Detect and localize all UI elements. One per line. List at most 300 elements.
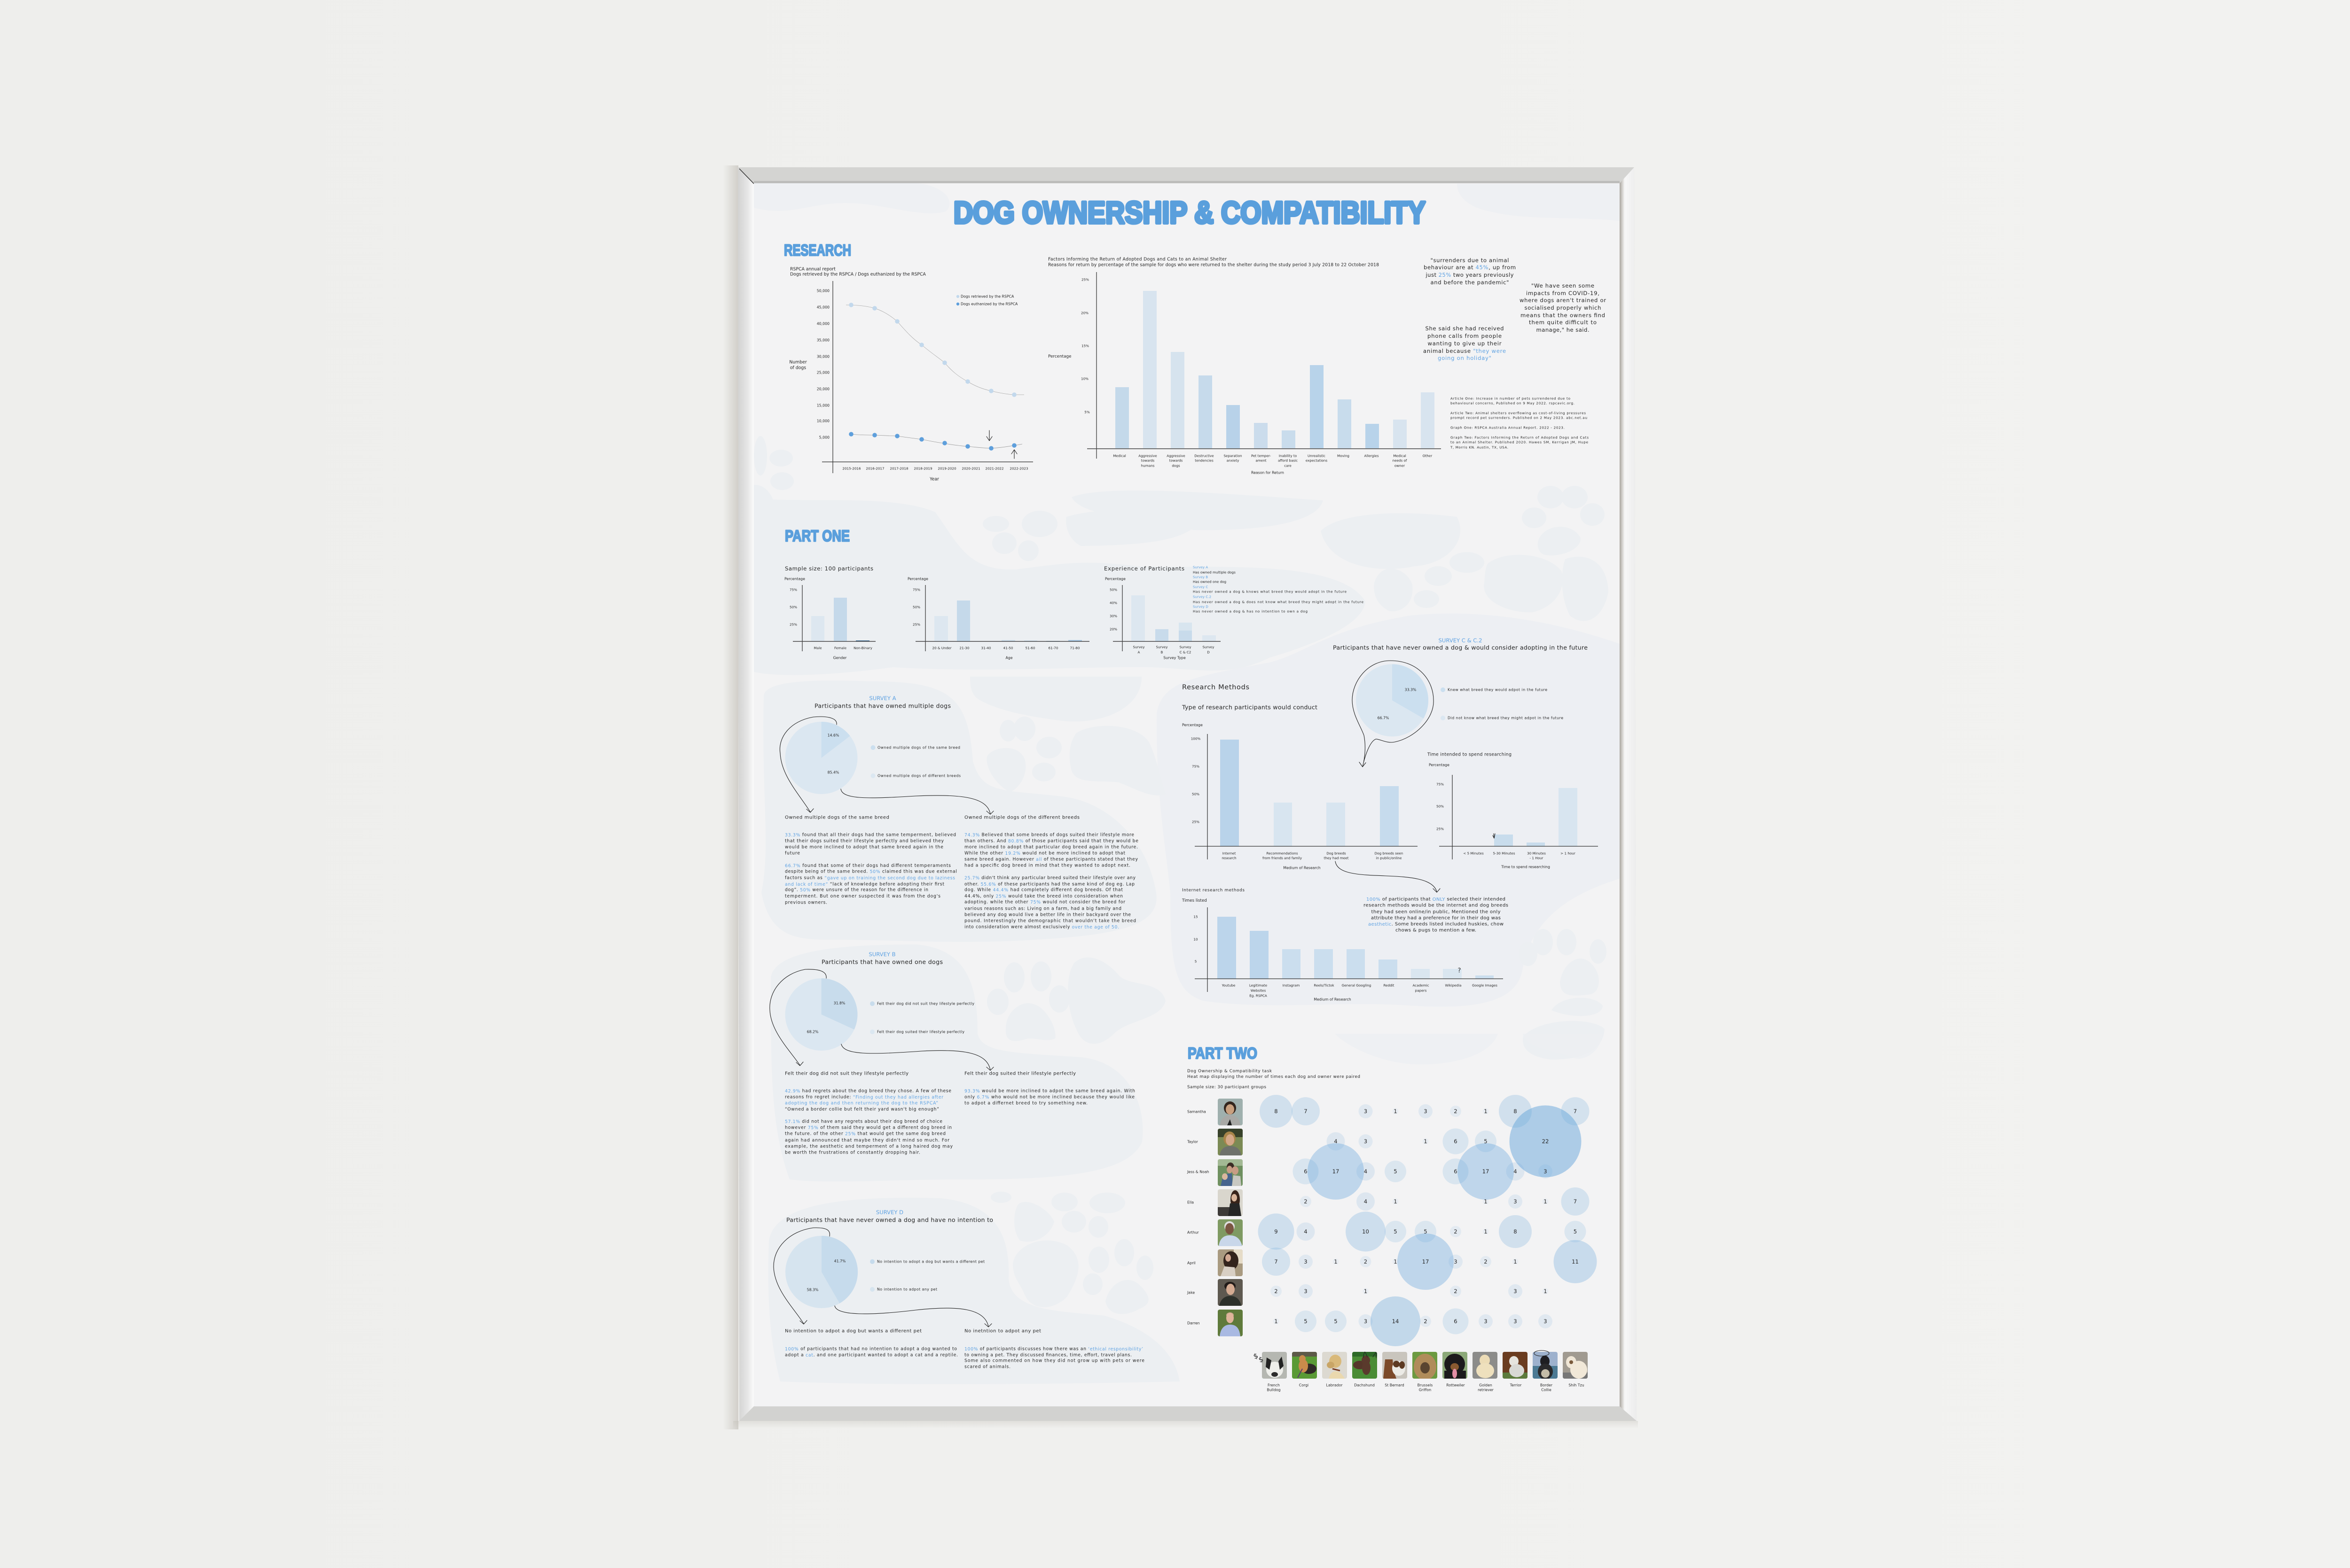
chart: gender: Male — [814, 646, 822, 650]
category labels: Inability to — [1279, 454, 1297, 458]
callout: aesthetic: they had seen online/in public, Mentioned the only — [1371, 910, 1501, 914]
dog breed labels: St Bernard — [1385, 1383, 1404, 1387]
row: April: 3 — [1304, 1258, 1308, 1265]
chart: internet research methods: Youtube — [1222, 983, 1236, 988]
owner names — [1187, 1110, 1209, 1325]
panel: research methods: Recommendations — [1267, 851, 1298, 855]
axes — [822, 281, 1033, 473]
quote: COVID impacts: where dogs aren't trained or — [1520, 297, 1606, 304]
chart: internet research methods: Internet research methods — [1182, 888, 1245, 893]
chart: experience of participants: 50% — [1110, 587, 1117, 592]
y axis labels: 10% — [1081, 377, 1089, 381]
chart: age: 75% — [913, 587, 920, 592]
panel: research methods: Research Methods — [1182, 684, 1249, 691]
x axis labels: 2020-2021 — [962, 466, 980, 471]
quote: COVID impacts: manage," he said. — [1536, 327, 1590, 333]
callout: aesthetic — [1363, 897, 1508, 933]
row: Samantha: 8 — [1274, 1108, 1278, 1115]
text: did not suit: Felt their dog did not suit they lifestyle perfectly — [785, 1071, 909, 1076]
row: Arthur — [1258, 1211, 1586, 1252]
pie chart: 33.3% — [1405, 688, 1416, 692]
doodle: halo — [1534, 1350, 1549, 1356]
panel: research methods: 25% — [1192, 819, 1199, 824]
photo: Arthur — [1218, 1219, 1243, 1246]
category labels — [1113, 454, 1432, 468]
row: Darren — [1273, 1296, 1552, 1346]
row: Jake: 3 — [1304, 1288, 1308, 1295]
text: different breeds: same breed again. However all of these participants stated that they — [964, 857, 1138, 862]
dog breed labels: French — [1268, 1383, 1280, 1387]
row: April: 1 — [1394, 1258, 1397, 1265]
text: same breed: and lack of time” “lack of knowledge before adopting their first — [785, 882, 944, 887]
text: different breeds: than others. And 80.8% of those participants said that they would be — [964, 838, 1138, 844]
chart: gender: 75% — [790, 587, 797, 592]
panel: research methods: Dog breeds seen — [1375, 851, 1403, 855]
text: any pet: scared of animals. — [964, 1365, 1010, 1369]
callout: aesthetic: aesthetic. Some breeds listed included huskies, chow — [1368, 922, 1504, 927]
text: same breed — [785, 815, 957, 905]
chart: internet research methods: ? — [1458, 967, 1461, 975]
owner names: Arthur — [1187, 1230, 1199, 1235]
category labels: afford basic — [1278, 459, 1298, 462]
row: Ella: 2 — [1304, 1198, 1308, 1205]
x axis labels: 2021-2022 — [985, 466, 1004, 471]
dog breed labels: Border — [1540, 1383, 1553, 1387]
references: prompt record pet surrenders. Published on 2 May 2023. abc.net.au — [1450, 415, 1587, 420]
references: Graph Two: Factors Informing the Return of Adopted Dogs and Cats — [1450, 435, 1589, 440]
row: Ella — [1300, 1187, 1590, 1216]
row: Arthur: 8 — [1513, 1228, 1517, 1235]
pie legend: No intention to adpot any pet — [877, 1287, 937, 1291]
pie chart — [1356, 664, 1428, 737]
text: different breeds: various reasons such as: Living on a farm, had a big family and — [964, 906, 1121, 912]
chart heading: Dogs retrieved by the RSPCA / Dogs euthanized by the RSPCA — [790, 272, 926, 277]
chart: age: Age — [1005, 656, 1013, 660]
chart: time intended to spend researching: 25% — [1436, 827, 1444, 831]
chart: age: 25% — [913, 622, 920, 627]
survey type key: Has never owned a dog & has no intention to own a dog — [1193, 609, 1308, 614]
chart: experience of participants: 30% — [1110, 614, 1117, 618]
row: Taylor: 22 — [1542, 1138, 1549, 1145]
owner photos — [1218, 1099, 1243, 1336]
pie chart: 58.3% — [807, 1287, 818, 1292]
row: Darren: 5 — [1304, 1318, 1308, 1325]
chart: experience of participants: A — [1138, 650, 1140, 654]
chart: time intended to spend researching: 5-30 Minutes — [1493, 851, 1515, 855]
text: different breeds: dog. While 44.4% had completely different dog breeds. Of that — [964, 887, 1123, 893]
chart: internet research methods: Reddit — [1383, 983, 1394, 988]
dog breed labels — [1267, 1383, 1584, 1392]
chart: time intended to spend researching: - 1 Hour — [1529, 856, 1543, 860]
photo: Rottweiler — [1442, 1352, 1467, 1379]
dog breed labels: Rottweiler — [1446, 1383, 1465, 1387]
row: Arthur: 9 — [1274, 1228, 1278, 1235]
y axis labels: 35,000 — [817, 338, 830, 342]
chart: gender: 50% — [790, 605, 797, 609]
row: Jake — [1270, 1284, 1548, 1298]
y axis labels: 5,000 — [819, 435, 830, 440]
panel: research methods: Dog breeds — [1326, 851, 1346, 855]
dog breed labels: Labrador — [1326, 1383, 1343, 1387]
row: Darren: 2 — [1424, 1318, 1427, 1325]
row: Samantha: 3 — [1364, 1108, 1367, 1115]
row: Samantha: 7 — [1574, 1108, 1577, 1115]
chart: time intended to spend researching: Time intended to spend researching — [1427, 752, 1512, 757]
pie legend: Knew what breed they would adpot in the future — [1448, 688, 1547, 692]
row: Samantha: 7 — [1304, 1108, 1308, 1115]
chart: gender: 25% — [790, 622, 797, 627]
chart: internet research methods: Wikipedia — [1445, 983, 1462, 988]
panel: research methods: Type of research participants would conduct — [1182, 704, 1317, 710]
category labels: Medical — [1113, 454, 1126, 458]
chart: time intended to spend researching: 75% — [1436, 782, 1444, 787]
pie legend: Owned multiple dogs of different breeds — [877, 773, 961, 778]
photo: Terrier — [1503, 1352, 1528, 1379]
x axis labels: 2017-2018 — [890, 466, 909, 471]
text: different pet: adopt a cat. and one participant wanted to adopt a cat and a reptile. — [785, 1352, 958, 1358]
row: Ella: 7 — [1574, 1198, 1577, 1205]
chart: experience of participants: 20% — [1110, 627, 1117, 632]
category labels: Destructive — [1194, 454, 1214, 458]
row: Samantha: 1 — [1394, 1108, 1397, 1115]
category labels: Allergies — [1364, 454, 1379, 458]
text: different breeds: had a specific dog breed in mind that they wanted to adopt next. — [964, 863, 1130, 868]
panel: research methods: they had meet — [1324, 856, 1349, 860]
text: suited: to adpot a differnet breed to try something new. — [964, 1100, 1088, 1106]
row: April — [1262, 1233, 1597, 1290]
quote: COVID impacts: them quite difficult to — [1529, 319, 1597, 326]
chart: age: 20 & Under — [932, 646, 952, 650]
pie chart: 14.6% — [828, 733, 839, 738]
pie chart: 85.4% — [828, 771, 839, 774]
doodle: dollar signs: $ — [1252, 1351, 1259, 1361]
photo: French Bulldog — [1262, 1352, 1287, 1379]
row: Jess and Noah: 6 — [1454, 1168, 1457, 1175]
text: any pet: 100% of participants discusses how there was an ‘ethical responsibility’ — [964, 1347, 1143, 1351]
pie chart: 68.2% — [807, 1030, 818, 1034]
photo: Brussels Griffon — [1412, 1352, 1437, 1380]
survey type key: Survey C — [1193, 585, 1208, 589]
sample size note: Sample size: 100 participants — [785, 565, 873, 572]
pie legend: Did not know what breed they might adpot in the future — [1448, 716, 1563, 720]
y axis labels: 45,000 — [817, 305, 830, 309]
chart: internet research methods: 10 — [1193, 937, 1198, 942]
pie legend — [870, 745, 961, 778]
row: Arthur: 1 — [1484, 1228, 1488, 1235]
chart: experience of participants: Survey — [1156, 645, 1168, 649]
poster frame — [738, 167, 1637, 1421]
chart: internet research methods: Instagram — [1283, 983, 1300, 988]
chart: time intended to spend researching: < 5 Minutes — [1463, 851, 1484, 855]
row: Arthur: 10 — [1362, 1228, 1369, 1235]
y axis labels: 25% — [1081, 277, 1089, 282]
text: did not suit: however 75% of them said they would get a different dog breed in — [785, 1125, 952, 1131]
chart: internet research methods: Websites — [1251, 989, 1266, 992]
chart: time intended to spend researching: Percentage — [1429, 763, 1449, 767]
chart: experience of participants: 40% — [1110, 601, 1117, 605]
heading: research: RESEARCH — [784, 242, 851, 259]
chart: internet research methods: Legitimate — [1249, 983, 1268, 988]
photo: Corgi — [1292, 1352, 1317, 1379]
references: to an Animal Shelter. Published 2020. Hawes SM, Kerrigan JM, Hupe — [1450, 440, 1589, 445]
chart: experience of participants — [1104, 565, 1221, 660]
row: Jess and Noah: 17 — [1482, 1168, 1489, 1175]
quote: surrenders: "surrenders due to animal — [1431, 257, 1509, 264]
legend: Dogs retrieved by the RSPCA — [961, 294, 1014, 299]
category labels: Other — [1423, 454, 1432, 458]
chart: experience of participants: C & C2 — [1180, 650, 1191, 654]
row: Jess and Noah: 3 — [1543, 1168, 1547, 1175]
arrow: any pet — [835, 1306, 992, 1327]
part two intro text: Heat map displaying the number of times each dog and owner were paired — [1187, 1075, 1360, 1079]
row: Darren: 1 — [1274, 1318, 1278, 1325]
row: Taylor: 5 — [1484, 1138, 1488, 1145]
text: different breeds: other. 55.6% of these participants had the same kind of dog eg. Lap — [964, 882, 1135, 887]
pie legend: Owned multiple dogs of the same breed — [877, 745, 960, 750]
dog breed labels: Dachshund — [1354, 1383, 1375, 1387]
row: Taylor: 3 — [1364, 1138, 1367, 1145]
photo: St Bernard — [1382, 1352, 1407, 1379]
chart heading: RSPCA annual report — [790, 267, 836, 272]
y axis labels: 15% — [1081, 344, 1089, 348]
chart heading: Factors Informing the Return of Adopted Dogs and Cats to an Animal Shelter — [1048, 257, 1227, 262]
text: did not suit: reasons fro regret include: “Finding out they had allergies after — [785, 1095, 943, 1100]
chart: age: 31-40 — [981, 646, 991, 650]
row: Taylor: 4 — [1334, 1138, 1338, 1145]
owner names: Taylor — [1187, 1140, 1198, 1144]
dog breed labels: Brussels — [1418, 1383, 1433, 1387]
panel: survey C and C2 — [1333, 637, 1588, 767]
chart: internet research methods: papers — [1415, 989, 1427, 992]
row: Samantha: 2 — [1454, 1108, 1457, 1115]
category labels: expectations — [1306, 459, 1327, 462]
dog breed labels: Corgi — [1299, 1383, 1308, 1387]
panel: research methods: Percentage — [1182, 723, 1203, 727]
row: Jess and Noah: 17 — [1332, 1168, 1339, 1175]
series: dogs euthanized — [849, 432, 1022, 451]
y axis labels: 30,000 — [817, 354, 830, 359]
row: Ella: 1 — [1543, 1198, 1547, 1205]
text: different breeds: believed any dog would live a better life in their backyard over the — [964, 913, 1131, 917]
category labels: owner — [1394, 463, 1405, 468]
x axis labels: 2022-2023 — [1010, 466, 1028, 471]
text: different breeds: into consideration were almost exclusively over the age of 50. — [964, 925, 1119, 929]
panel: survey C and C2: SURVEY C & C.2 — [1439, 637, 1482, 644]
row: Samantha: 8 — [1513, 1108, 1517, 1115]
chart: time intended to spend researching: 30 Minutes — [1527, 851, 1546, 855]
row: Ella: 4 — [1364, 1198, 1367, 1205]
references: T, Morris KN. Austin, TX, USA. — [1450, 445, 1508, 449]
pie legend — [870, 1259, 985, 1292]
survey type key: Has never owned a dog & does not know what breed they might adopt in the future — [1193, 600, 1364, 604]
survey type key: Survey A — [1193, 565, 1208, 569]
panel: survey D: SURVEY D — [876, 1209, 903, 1216]
x axis labels: 2019-2020 — [938, 466, 956, 471]
text: suited: 93.3% would be more inclined to adpot the same breed again. With — [964, 1088, 1135, 1094]
chart: age: 71-80 — [1070, 646, 1080, 650]
chart: internet research methods: Academic — [1412, 983, 1429, 988]
chart: experience of participants: Survey — [1179, 645, 1191, 649]
heading: part one: PART ONE — [785, 527, 850, 545]
panel: reasons for return bar chart — [1048, 257, 1441, 475]
x axis labels — [842, 466, 1028, 471]
chart: experience of participants: Percentage — [1105, 577, 1126, 581]
chart: gender: Non-Binary — [854, 646, 873, 650]
owner names: Jess & Noah — [1187, 1170, 1209, 1174]
chart: time intended to spend researching — [1427, 752, 1598, 869]
category labels: dogs — [1172, 463, 1180, 468]
chart: internet research methods: General Googling — [1342, 983, 1371, 988]
text: different breeds: pound. Interestingly the demographic that wouldn't take the breed — [964, 918, 1136, 924]
pie chart: 31.8% — [834, 1001, 845, 1006]
panel: research methods: Internet — [1222, 851, 1236, 855]
dog breed labels: Griffon — [1419, 1388, 1431, 1392]
chart: experience of participants: Survey Type — [1163, 656, 1186, 660]
photo: Shih Tzu — [1563, 1352, 1588, 1379]
row: Jake: 3 — [1513, 1288, 1517, 1295]
quote: going on holiday: animal because "they were — [1423, 348, 1506, 354]
text: suited: only 6.7% who would not be more inclined because they would like — [964, 1095, 1135, 1100]
panel: survey B: Participants that have owned one dogs — [822, 959, 943, 965]
quote: surrenders: and before the pandemic" — [1431, 279, 1509, 286]
chart: experience of participants: B — [1161, 650, 1163, 654]
category labels: Moving — [1337, 454, 1349, 458]
text: did not suit: “Owned a border collie but felt their yard wasn't big enough” — [785, 1107, 939, 1112]
y axis title: of dogs — [790, 366, 806, 370]
chart: gender: Gender — [833, 656, 847, 660]
x axis title: Year — [929, 476, 939, 482]
text: did not suit: 57.1% did not have any regrets about their dog breed of choice — [785, 1119, 942, 1124]
survey type key: Has owned one dog — [1193, 580, 1226, 584]
row: Jake: 2 — [1274, 1288, 1278, 1295]
arrow: dog breeds to callout — [1335, 861, 1440, 892]
references: Graph One: RSPCA Australia Annual Report. 2022 - 2023. — [1450, 426, 1565, 429]
dog breed labels: Terrior — [1510, 1383, 1522, 1387]
arrow: did not suit — [770, 969, 826, 1066]
row: April: 1 — [1334, 1258, 1338, 1265]
chart: internet research methods: 5 — [1195, 960, 1197, 963]
chart heading — [1048, 257, 1379, 268]
chart: internet research methods: Times listed — [1182, 898, 1207, 903]
row: Samantha: 3 — [1424, 1108, 1427, 1115]
text: any pet: No inetntion to adpot any pet — [964, 1329, 1041, 1334]
chart: internet research methods — [1182, 888, 1503, 1002]
quote: COVID impacts: impacts from COVID-19, — [1526, 290, 1599, 296]
text: different breeds — [964, 815, 1138, 929]
quote: going on holiday — [1423, 325, 1506, 361]
category labels: care — [1284, 463, 1292, 468]
text: different breeds: 44.4%, only 25% would take the breed into consideration when — [964, 894, 1123, 899]
row: Ella: 1 — [1394, 1198, 1397, 1205]
quote: going on holiday: She said she had received — [1425, 325, 1504, 332]
text: same breed: that their dogs suited their lifestyle perfectly and believed they — [785, 838, 944, 844]
row: Taylor: 1 — [1424, 1138, 1427, 1145]
survey type key: Survey B — [1193, 575, 1208, 579]
y axis labels: 15,000 — [817, 403, 830, 408]
photo: Dachshund — [1352, 1352, 1377, 1379]
chart: age: 61-70 — [1049, 646, 1058, 650]
chart: age: 50% — [913, 605, 920, 609]
pie legend: Felt their dog did not suit they lifestyle perfectly — [877, 1002, 974, 1006]
text: did not suit — [785, 1071, 953, 1155]
quote: COVID impacts — [1520, 282, 1606, 333]
dog breed labels: Bulldog — [1267, 1388, 1281, 1392]
owner names: Ella — [1187, 1200, 1194, 1205]
row: Arthur: 2 — [1454, 1228, 1457, 1235]
chart: age: 21-30 — [960, 646, 970, 650]
x axis labels: 2015-2016 — [842, 466, 861, 471]
category labels: ament — [1255, 459, 1267, 462]
photo: April — [1218, 1249, 1243, 1276]
owner names: Samantha — [1187, 1110, 1206, 1114]
category labels: humans — [1141, 463, 1155, 468]
panel: survey A: Participants that have owned multiple dogs — [815, 702, 951, 710]
photo: Jake — [1218, 1279, 1243, 1306]
panel: research methods: in public/online — [1376, 856, 1402, 860]
chart: age — [908, 577, 1089, 660]
panel: survey A: SURVEY A — [869, 695, 896, 702]
text: same breed: despite being of the same breed. 50% claimed this was due external — [785, 869, 957, 874]
chart: internet research methods: 15 — [1193, 914, 1198, 919]
owner names: April — [1187, 1261, 1196, 1265]
y axis labels: 20% — [1081, 311, 1089, 315]
category labels: Aggressive — [1167, 454, 1185, 458]
category labels: Separation — [1223, 454, 1242, 458]
legend: Dogs euthanized by the RSPCA — [961, 302, 1018, 306]
panel: survey D: Participants that have never owned a dog and have no intention to — [786, 1216, 993, 1224]
chart: gender: Percentage — [784, 577, 805, 581]
row: April: 17 — [1422, 1258, 1429, 1265]
wall shadow below frame — [733, 1421, 1638, 1428]
text: same breed: temperment. But one owner suspected it was from the dog's — [785, 894, 940, 899]
category labels: towards — [1141, 459, 1155, 462]
y axis title — [789, 360, 807, 370]
quote: COVID impacts: socialised properly which — [1525, 304, 1601, 311]
row: Darren: 14 — [1392, 1318, 1399, 1325]
heat map bubbles — [1258, 1095, 1597, 1346]
row: Jess and Noah: 6 — [1304, 1168, 1308, 1175]
category labels: Medical — [1393, 454, 1406, 458]
chart: gender — [784, 577, 876, 660]
callout: aesthetic: attribute they had a preference for in their dog was — [1371, 915, 1501, 921]
chart: age: 51-60 — [1026, 646, 1035, 650]
chart: experience of participants: Experience of Participants — [1104, 565, 1184, 572]
pie chart — [785, 722, 857, 794]
references: behavioural concerns, Published on 9 May 2022. rspcavic.org. — [1450, 401, 1574, 405]
panel: RSPCA line chart — [789, 267, 1033, 482]
references: Article One: Increase in number of pets surrendered due to — [1450, 397, 1570, 400]
dog breed labels: Golden — [1479, 1383, 1492, 1387]
chart: experience of participants: Survey — [1202, 645, 1214, 649]
row: Jess and Noah: 5 — [1394, 1168, 1397, 1175]
photo: Jess and Noah — [1218, 1159, 1243, 1186]
y axis labels: 10,000 — [817, 419, 830, 423]
y axis labels: 40,000 — [817, 321, 830, 326]
chart: experience of participants: Survey — [1133, 645, 1145, 649]
category labels: Aggressive — [1138, 454, 1157, 458]
dog breed labels: Shih Tzu — [1568, 1383, 1584, 1387]
callout: aesthetic: chows & pugs to mention a few. — [1395, 928, 1476, 933]
pie legend — [870, 1001, 974, 1034]
row: Jess and Noah — [1292, 1143, 1552, 1200]
text: did not suit: 42.9% had regrets about the dog breed they chose. A few of these — [785, 1088, 951, 1094]
row: April: 11 — [1572, 1258, 1579, 1265]
wall shadow left of frame — [723, 165, 738, 1429]
pie legend: Felt their dog suited their lifestyle perfectly — [877, 1030, 964, 1034]
text: different breeds: Owned multiple dogs of the different breeds — [964, 815, 1080, 820]
row: Jake: 1 — [1543, 1288, 1547, 1295]
chart: age: Percentage — [908, 577, 928, 581]
